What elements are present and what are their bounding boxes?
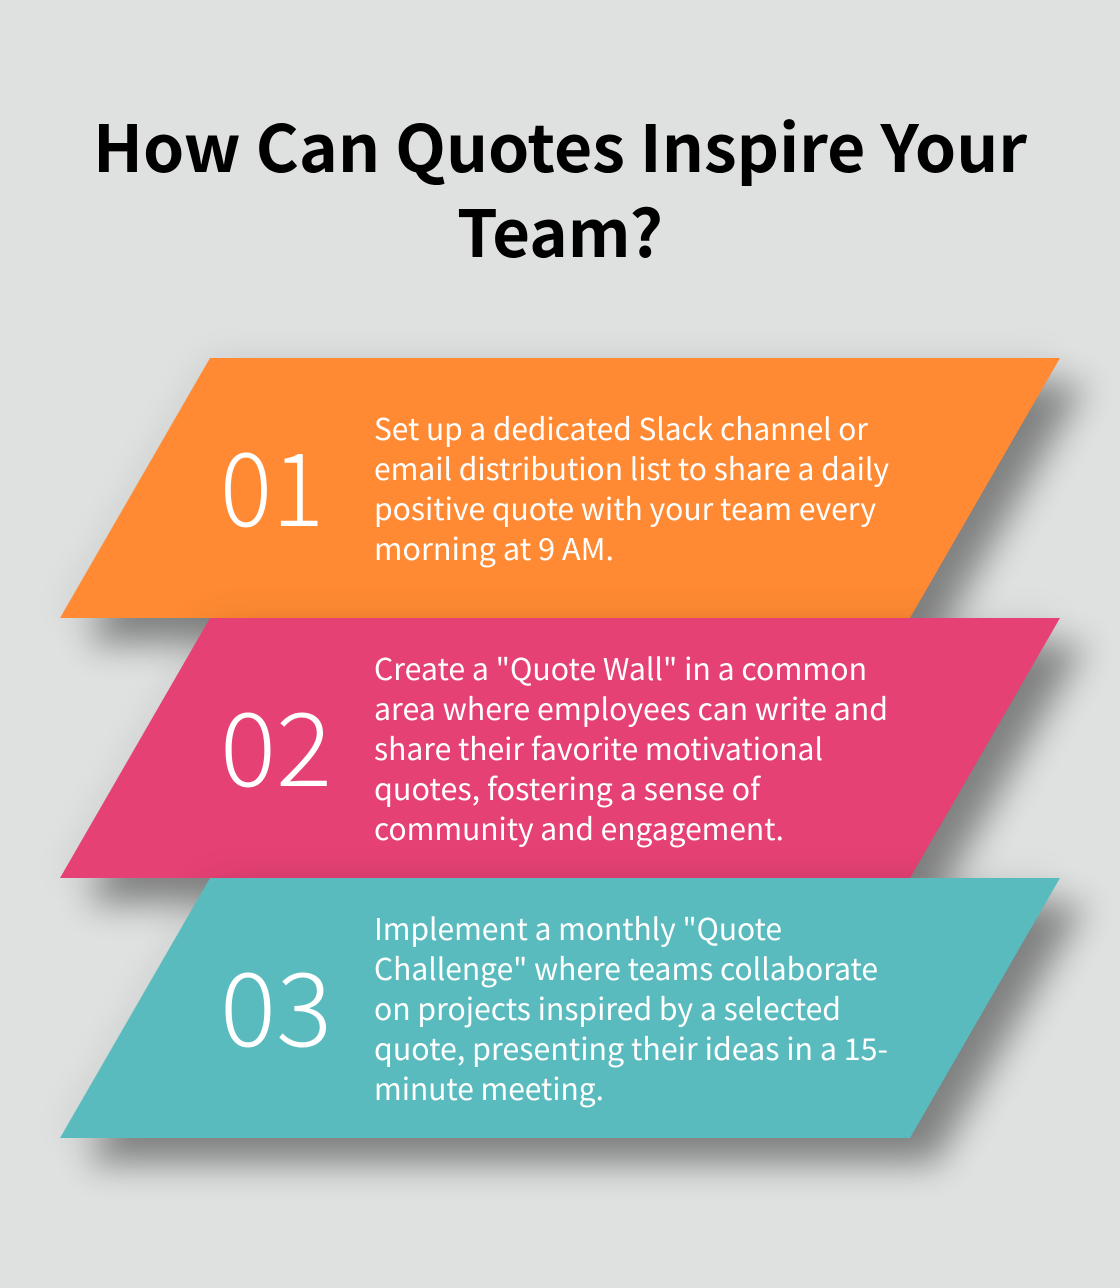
- panel: step 02: area where employees can write and: [374, 685, 888, 729]
- panel: step 03: minute meeting.: [374, 1065, 604, 1109]
- panel: step 01: [60, 358, 1086, 644]
- panel: step 03: on projects inspired by a selected: [374, 985, 841, 1029]
- panel: step 03: quote, presenting their ideas in a 15-: [374, 1025, 888, 1069]
- panel: step 02: [60, 618, 1086, 904]
- title: How Can Quotes Inspire Your: [93, 97, 1028, 191]
- panel: step 02: quotes, fostering a sense of: [374, 765, 761, 809]
- panel: step 01: positive quote with your team every: [374, 485, 876, 529]
- title: Team?: [457, 182, 663, 276]
- panel: step 01: 01: [220, 409, 324, 556]
- panel: step 02: Create a "Quote Wall" in a common: [374, 645, 867, 689]
- panel: step 03: Implement a monthly "Quote: [374, 905, 782, 949]
- panel: step 01: Set up a dedicated Slack channel or: [374, 405, 868, 449]
- panel: step 03: Challenge" where teams collaborate: [374, 945, 878, 989]
- panel: step 03: [60, 878, 1086, 1164]
- panel: step 03: 03: [220, 929, 332, 1076]
- panel: step 01: email distribution list to share a daily: [374, 445, 889, 489]
- panel: step 02: community and engagement.: [374, 805, 784, 849]
- panel: step 01: morning at 9 AM.: [374, 525, 614, 569]
- title: [93, 97, 1028, 276]
- panel: step 02: share their favorite motivational: [374, 725, 823, 769]
- panel: step 02: 02: [220, 669, 332, 816]
